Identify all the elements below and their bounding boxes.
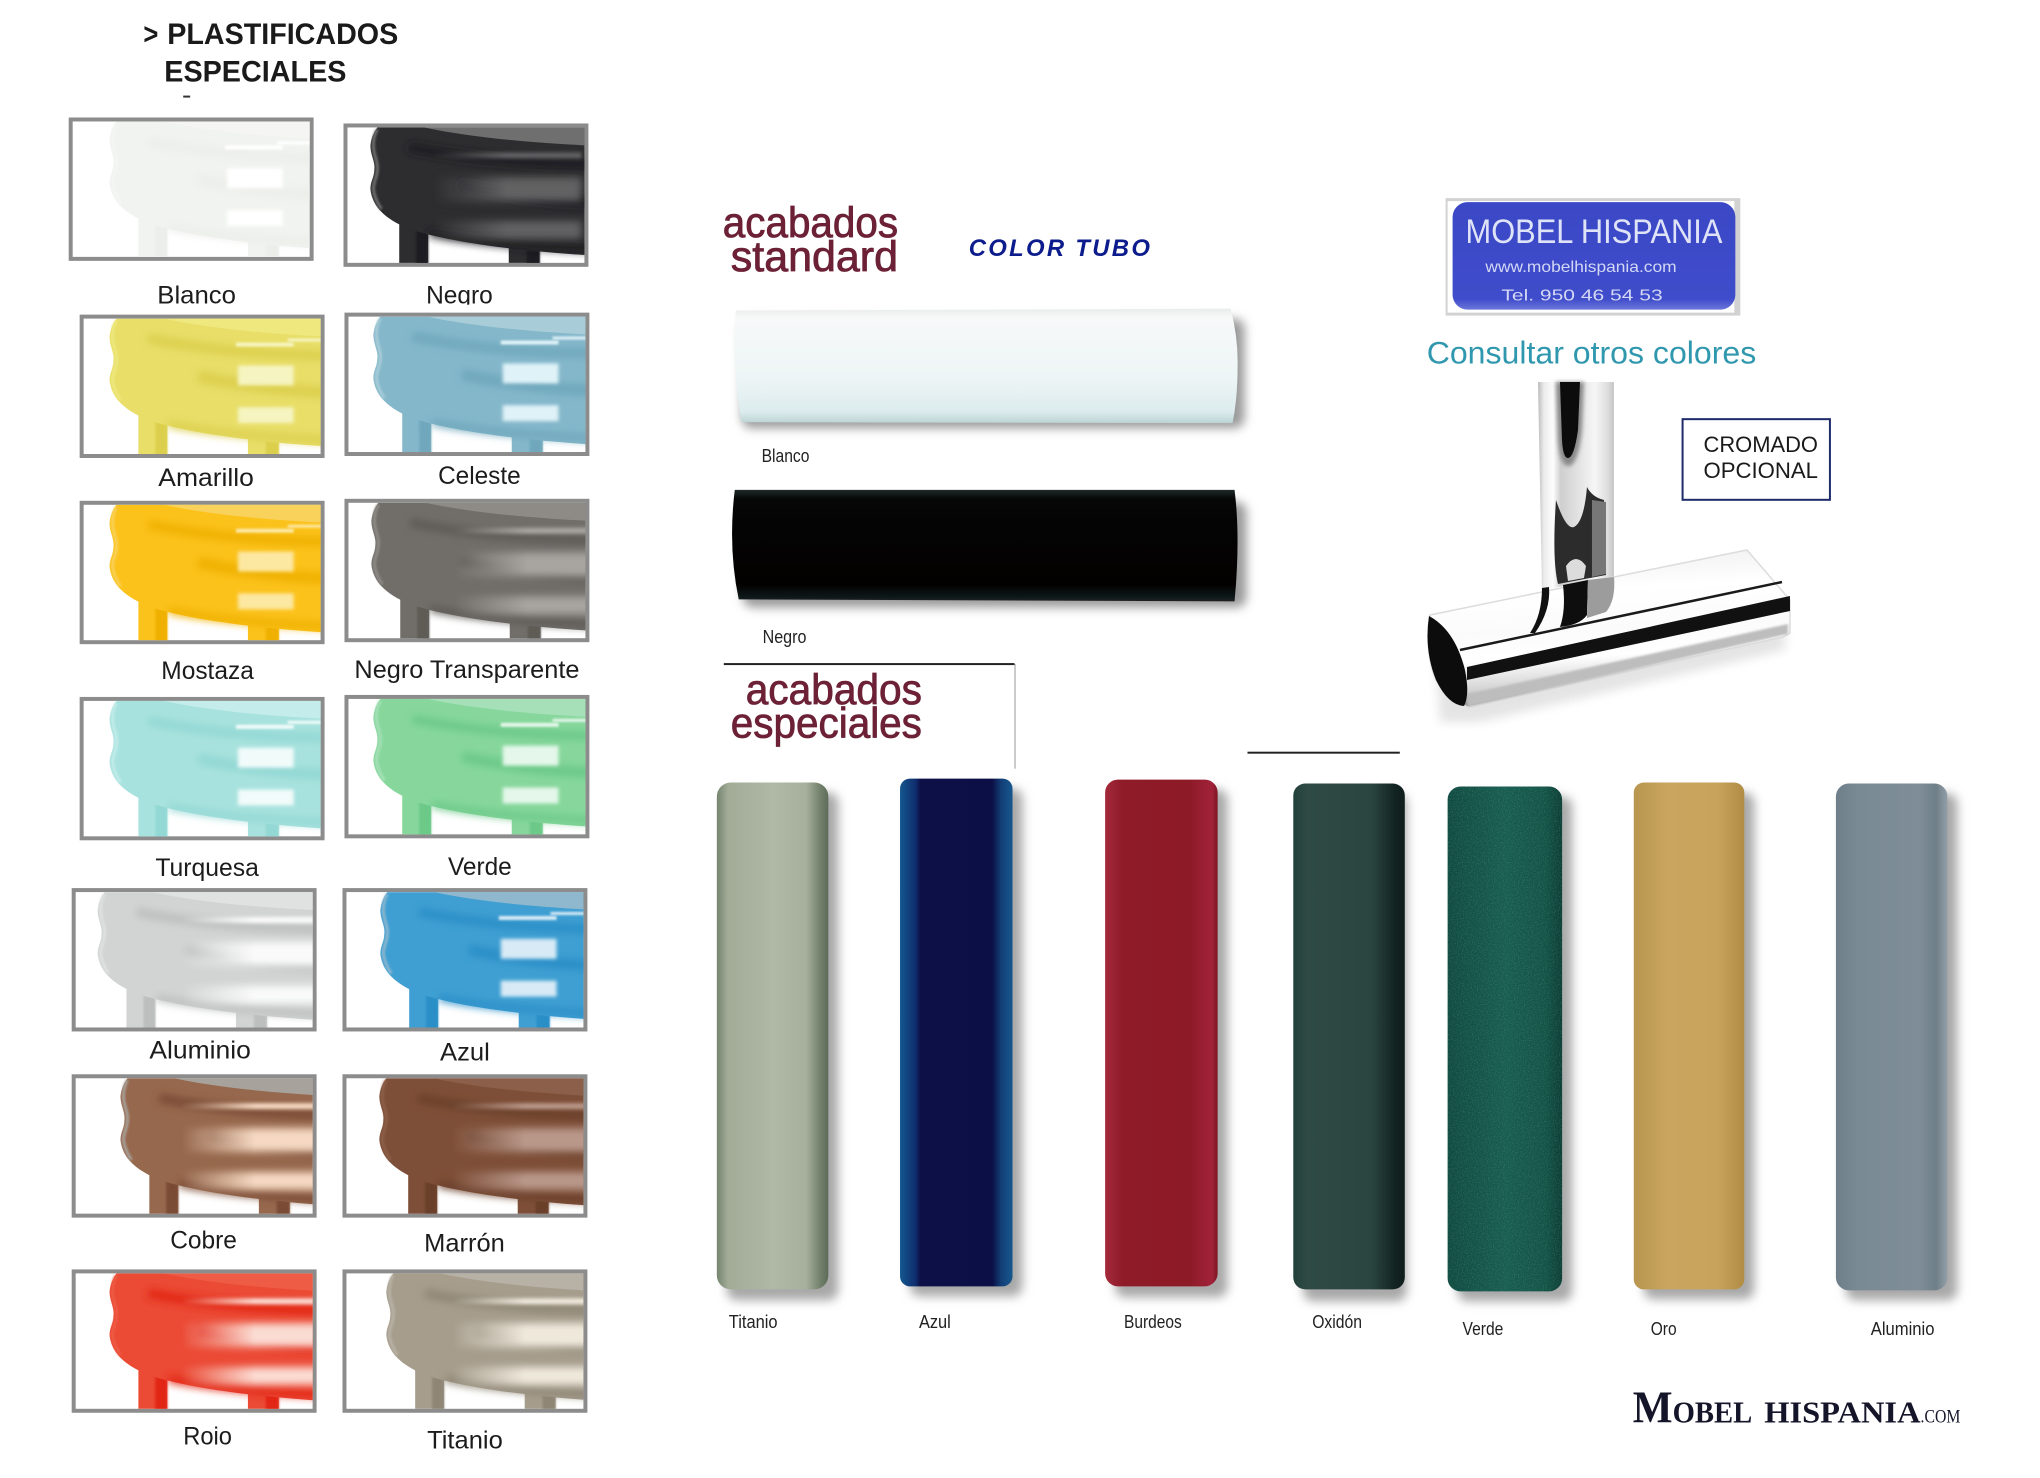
swatch: Verde bbox=[346, 697, 671, 881]
label: Oxidón: Oxidón bbox=[1312, 1312, 1362, 1333]
tube: Blanco standard bbox=[735, 309, 1245, 467]
footer wordmark: mobel hispania.com bbox=[1633, 1382, 1960, 1433]
label: Turquesa: Turquesa bbox=[155, 854, 259, 882]
swatch: Negro bbox=[345, 125, 668, 310]
label: Amarillo: Amarillo bbox=[158, 464, 254, 492]
label: Aluminio: Aluminio bbox=[149, 1036, 251, 1064]
heading: plastificados especiales: > bbox=[143, 18, 158, 51]
heading: acabados especiales bbox=[731, 666, 922, 748]
heading: acabados especiales: acabados bbox=[746, 666, 922, 714]
tube: Negro standard bbox=[732, 490, 1247, 648]
logo: Mobel Hispania: MOBEL HISPANIA bbox=[1466, 213, 1723, 251]
swatch: Mostaza bbox=[82, 503, 407, 685]
label: Blanco: Blanco bbox=[762, 446, 809, 467]
swatch: Turquesa bbox=[82, 699, 407, 882]
tube: Aluminio bbox=[1836, 784, 1957, 1340]
heading: plastificados especiales: PLASTIFICADOS bbox=[167, 18, 398, 51]
heading: color tubo: COLOR TUBO bbox=[969, 235, 1150, 262]
heading: plastificados especiales: ESPECIALES bbox=[164, 56, 346, 89]
heading: acabados standard: standard bbox=[731, 233, 898, 281]
footer wordmark: mobel hispania.com: .COM bbox=[1921, 1407, 1960, 1428]
logo: Mobel Hispania: Tel. 950 46 54 53 bbox=[1501, 288, 1663, 305]
label: Cobre: Cobre bbox=[170, 1227, 237, 1255]
heading: acabados standard: acabados bbox=[723, 199, 898, 247]
footer wordmark: mobel hispania.com: M bbox=[1633, 1382, 1673, 1433]
label: Verde: Verde bbox=[448, 853, 512, 881]
tube: Oxidón bbox=[1293, 784, 1407, 1333]
swatch: Roio bbox=[74, 1271, 407, 1451]
label: Titanio: Titanio bbox=[427, 1427, 503, 1455]
label: Blanco: Blanco bbox=[157, 282, 236, 310]
swatch: Cobre bbox=[74, 1076, 418, 1255]
swatch: Titanio bbox=[344, 1271, 684, 1455]
label: Titanio: Titanio bbox=[729, 1312, 778, 1333]
swatch: Aluminio bbox=[74, 890, 395, 1064]
heading: acabados standard bbox=[723, 199, 898, 281]
swatch: Marrón bbox=[344, 1076, 677, 1257]
label: Negro Transparente: Negro Transparente bbox=[354, 656, 579, 684]
tube: Verde bbox=[1448, 787, 1572, 1340]
swatch: Celeste bbox=[346, 315, 671, 490]
label: Negro: Negro bbox=[426, 282, 493, 310]
tube: Azul bbox=[900, 779, 1022, 1333]
logo: Mobel Hispania bbox=[1446, 198, 1740, 316]
label: Burdeos: Burdeos bbox=[1124, 1312, 1182, 1333]
footer wordmark: mobel hispania.com: OBEL bbox=[1673, 1396, 1752, 1430]
callout: cromado opcional: CROMADO bbox=[1703, 432, 1818, 457]
tube: Titanio bbox=[717, 783, 838, 1333]
logo: Mobel Hispania: www.mobelhispania.com bbox=[1484, 259, 1677, 276]
callout: cromado opcional: OPCIONAL bbox=[1703, 458, 1818, 483]
label: Celeste: Celeste bbox=[438, 462, 521, 490]
label: Aluminio: Aluminio bbox=[1871, 1319, 1934, 1340]
label: Azul: Azul bbox=[919, 1312, 951, 1333]
label: Oro: Oro bbox=[1651, 1319, 1677, 1340]
divider lines bbox=[724, 663, 1400, 769]
swatch: Azul bbox=[344, 890, 678, 1066]
label: Negro: Negro bbox=[763, 627, 806, 648]
heading: acabados especiales: especiales bbox=[731, 700, 922, 748]
image: tubo cromado bbox=[1428, 382, 1790, 722]
tube: Oro bbox=[1634, 783, 1754, 1340]
heading: plastificados especiales bbox=[143, 18, 398, 98]
tube: Burdeos bbox=[1105, 780, 1228, 1333]
label: Roio: Roio bbox=[183, 1423, 232, 1451]
label: Mostaza: Mostaza bbox=[161, 657, 254, 685]
label: Verde: Verde bbox=[1463, 1319, 1503, 1340]
note: consultar otros colores: Consultar otros colores bbox=[1427, 334, 1756, 370]
footer wordmark: mobel hispania.com: HISPANIA bbox=[1764, 1396, 1921, 1430]
swatch: Negro Transparente bbox=[346, 501, 669, 684]
swatch: Blanco bbox=[71, 119, 407, 310]
callout: cromado opcional bbox=[1683, 419, 1830, 500]
label: Marrón: Marrón bbox=[424, 1229, 505, 1257]
swatch: Amarillo bbox=[82, 317, 407, 492]
label: Azul: Azul bbox=[440, 1038, 490, 1066]
